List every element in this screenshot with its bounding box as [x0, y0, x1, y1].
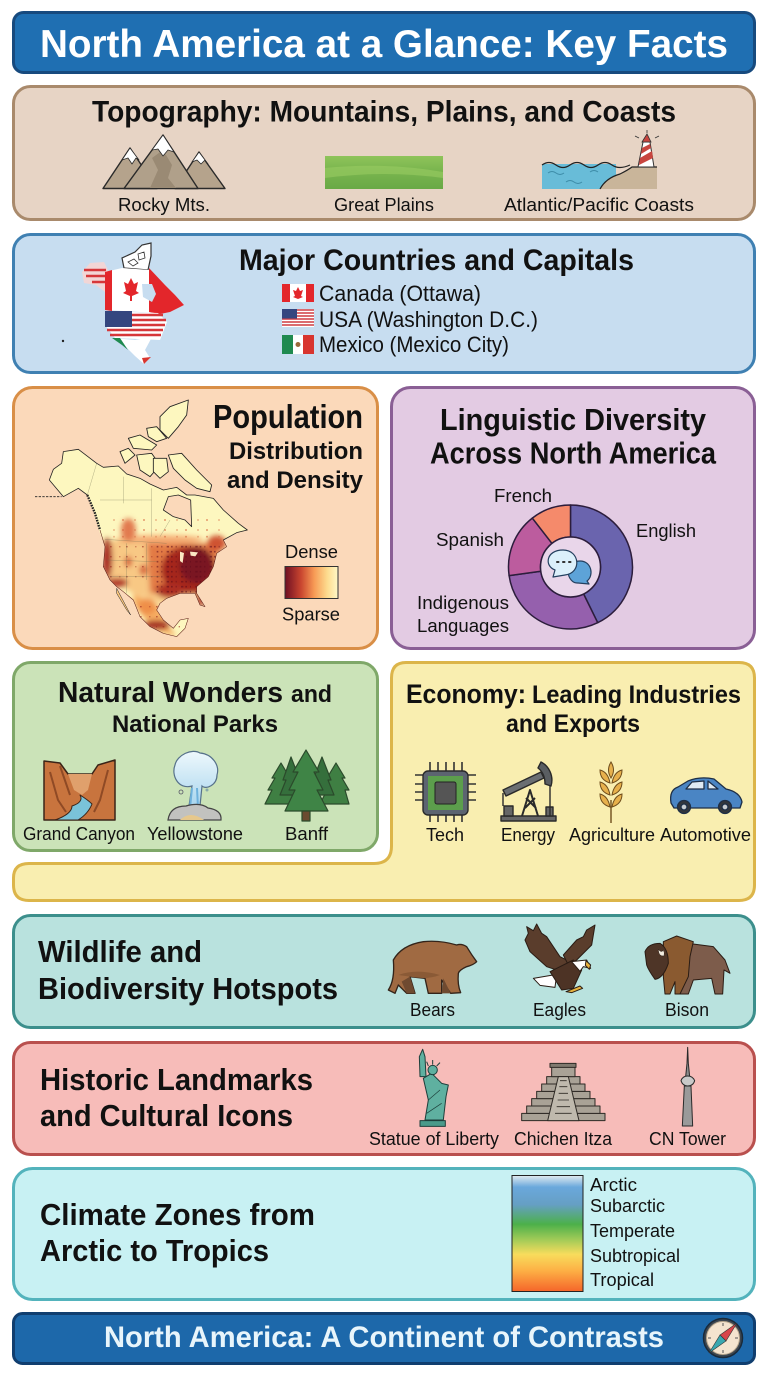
label: Chichen Itza: Chichen Itza — [514, 1129, 613, 1149]
panel: topography — [14, 86, 754, 220]
label: Agriculture: Agriculture — [569, 825, 655, 845]
map: North America flags — [62, 243, 184, 364]
text: Mexico: Mexico (Mexico City) — [319, 332, 509, 357]
panel: wildlife — [14, 916, 754, 1028]
panel: population — [14, 388, 378, 648]
icon: Grand Canyon — [44, 760, 115, 820]
label: Indigenous Languages: Languages — [417, 615, 509, 636]
flag: Canada — [282, 284, 314, 302]
label: Statue of Liberty: Statue of Liberty — [369, 1129, 499, 1149]
icon: oil pump — [501, 762, 556, 821]
label: Banff: Banff — [285, 824, 329, 844]
icon: Yellowstone geyser — [168, 751, 221, 820]
label: Bears: Bears — [410, 1000, 455, 1020]
heading: climate: Climate Zones from — [40, 1198, 315, 1232]
panel: climate — [14, 1168, 754, 1300]
heading: wildlife: Wildlife and — [38, 935, 202, 969]
label: Eagles: Eagles — [533, 1000, 586, 1020]
icon: coast with lighthouse — [542, 130, 659, 189]
label: coasts: Atlantic/Pacific Coasts — [504, 194, 694, 215]
label: Grand Canyon: Grand Canyon — [23, 824, 135, 844]
icon: plains — [325, 156, 443, 189]
heading: natural wonders — [58, 677, 332, 738]
icon: compass — [704, 1318, 742, 1358]
title banner: North America at a Glance: Key Facts — [40, 23, 728, 66]
label: Arctic: Arctic — [590, 1175, 637, 1195]
heading: economy — [406, 679, 741, 738]
label: Spanish: Spanish — [436, 529, 504, 550]
panel: landmarks — [14, 1042, 754, 1154]
legend: climate gradient bar — [512, 1176, 583, 1292]
heading: natural wonders: National Parks — [112, 711, 278, 738]
heading: wildlife: Biodiversity Hotspots — [38, 972, 338, 1006]
map: population density — [35, 400, 247, 637]
icon: chat bubbles — [548, 550, 591, 584]
icon: bison — [645, 936, 730, 994]
icon: Chichen Itza — [522, 1063, 605, 1121]
heading: wildlife — [38, 935, 338, 1006]
label: Indigenous Languages — [417, 592, 509, 636]
legend label: Dense: Dense — [285, 541, 338, 562]
heading: linguistic diversity: Across North America — [430, 436, 717, 470]
heading: natural wonders: Natural Wonders — [58, 677, 283, 709]
icon: wheat — [600, 762, 622, 823]
text: USA: USA (Washington D.C.) — [319, 307, 538, 332]
icon: Banff trees — [265, 750, 349, 821]
label: Subtropical: Subtropical — [590, 1246, 680, 1266]
icon: CN Tower — [681, 1047, 695, 1126]
donut chart: languages — [508, 505, 632, 629]
panel: economy — [14, 662, 754, 900]
legend: density colour bar — [285, 566, 338, 598]
subheading: distribution: Distribution — [229, 438, 363, 465]
footer banner — [14, 1314, 754, 1364]
label: Subarctic: Subarctic — [590, 1196, 665, 1216]
icon: car — [671, 778, 742, 814]
legend label: Sparse: Sparse — [282, 604, 340, 624]
label: Yellowstone: Yellowstone — [147, 824, 243, 844]
label: Great Plains: Great Plains — [334, 194, 434, 215]
label: Energy: Energy — [501, 825, 555, 845]
heading: climate: Arctic to Tropics — [40, 1234, 269, 1268]
footer banner: North America: A Continent of Contrasts — [104, 1321, 664, 1354]
heading: natural wonders: and — [291, 681, 332, 708]
heading: landmarks: Historic Landmarks — [40, 1063, 313, 1097]
icon: microchip — [415, 762, 476, 822]
heading: economy: Leading Industries — [532, 681, 741, 709]
label: Tech: Tech — [426, 825, 464, 845]
heading: economy: Economy: — [406, 679, 526, 709]
heading: linguistic diversity: Linguistic Diversity — [440, 402, 707, 437]
panel: natural wonders — [14, 662, 378, 850]
heading: linguistic diversity — [430, 402, 717, 470]
heading: landmarks: and Cultural Icons — [40, 1099, 293, 1133]
label: CN Tower: CN Tower — [649, 1129, 726, 1149]
label: Bison: Bison — [665, 1000, 709, 1020]
panel: countries and capitals — [14, 234, 754, 372]
flag: USA — [282, 309, 314, 327]
icon: Statue of Liberty — [419, 1049, 448, 1126]
flag: Mexico — [282, 335, 314, 354]
heading: climate — [40, 1198, 315, 1268]
heading: countries: Major Countries and Capitals — [239, 244, 634, 277]
icon: mountains — [103, 135, 225, 188]
heading: topography: Topography: Mountains, Plains, and Coasts — [92, 96, 676, 128]
label: Rocky Mts.: Rocky Mts. — [118, 194, 210, 215]
panel: linguistic diversity — [392, 388, 754, 648]
label: Indigenous Languages: Indigenous — [417, 592, 509, 613]
heading: landmarks — [40, 1063, 313, 1133]
label: Automotive: Automotive — [660, 825, 751, 845]
subheading: and density: and Density — [227, 467, 363, 494]
text: Canada: Canada (Ottawa) — [319, 281, 481, 306]
label: Tropical: Tropical — [590, 1270, 654, 1290]
heading: Population: Population — [213, 398, 363, 435]
label: French: French — [494, 485, 552, 506]
icon: bear — [388, 941, 477, 993]
icon: eagle — [525, 924, 595, 993]
label: English: English — [636, 520, 696, 541]
heading: economy: and Exports — [506, 710, 640, 738]
label: Temperate: Temperate — [590, 1221, 675, 1241]
title banner — [14, 12, 754, 72]
